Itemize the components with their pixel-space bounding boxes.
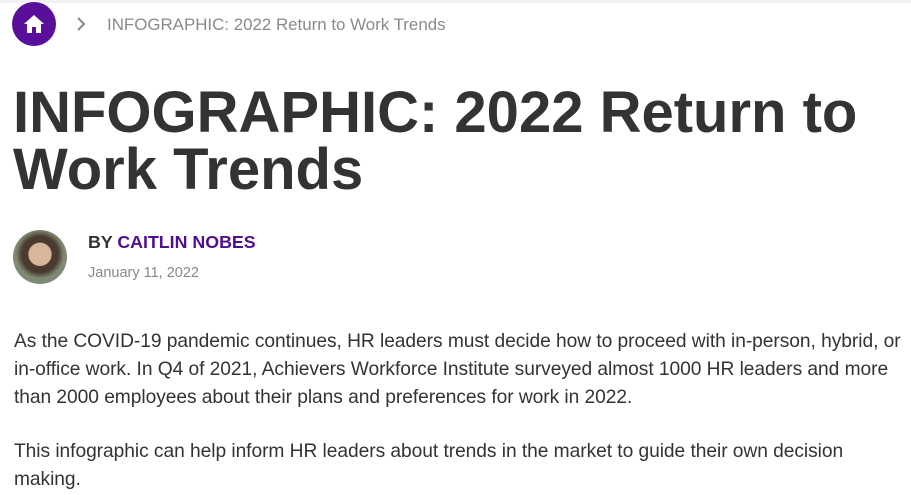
title: Work Trends: [13, 137, 363, 202]
second paragraph: [14, 441, 843, 490]
intro paragraph: As the COVID-19 pandemic continues, HR leaders must decide how to proceed with in-person, hybrid, or: [14, 331, 901, 352]
breadcrumb chevron: [77, 17, 86, 31]
intro paragraph: in-office work. In Q4 of 2021, Achievers Workforce Institute surveyed almost 1000 HR leaders and more: [14, 359, 888, 380]
title: [13, 80, 857, 202]
date: January 11, 2022: [88, 265, 199, 281]
intro paragraph: than 2000 employees about their plans and preferences for work in 2022.: [14, 387, 632, 408]
byline: BY CAITLIN NOBES: [88, 232, 256, 252]
icon: home: [12, 2, 56, 46]
second paragraph: making.: [14, 469, 81, 490]
breadcrumb: [12, 2, 446, 46]
avatar: [13, 230, 67, 284]
breadcrumb text: INFOGRAPHIC: 2022 Return to Work Trends: [107, 15, 446, 34]
author block: [13, 230, 256, 284]
title: INFOGRAPHIC: 2022 Return to: [13, 80, 857, 145]
intro paragraph: [14, 331, 901, 408]
second paragraph: This infographic can help inform HR leaders about trends in the market to guide their own decision: [14, 441, 843, 462]
